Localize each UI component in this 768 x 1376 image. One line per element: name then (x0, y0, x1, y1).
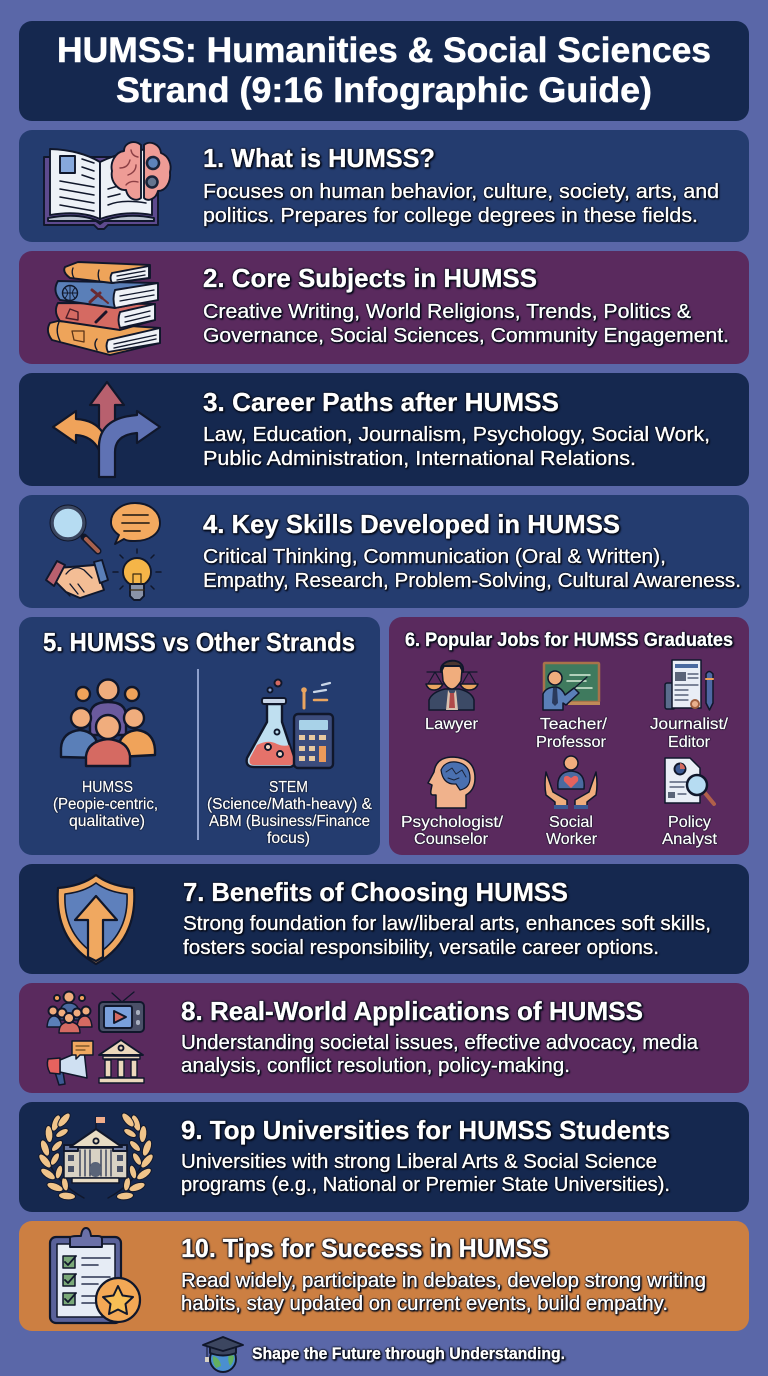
description (181, 1269, 706, 1315)
job: lawyer (426, 661, 478, 710)
heading: 7. Benefits of Choosing HUMSS (183, 877, 568, 907)
description (181, 1150, 670, 1196)
heading: 8. Real-World Applications of HUMSS (181, 996, 643, 1026)
label: HUMSS: HUMSS (82, 779, 133, 796)
description (183, 912, 711, 959)
panel: tips for success (19, 1221, 749, 1331)
title (57, 31, 711, 110)
job: journalist (665, 660, 713, 710)
label: HUMSS: qualitative) (69, 813, 145, 830)
panel: core subjects (19, 251, 749, 364)
label: psychologist: Counselor (414, 831, 489, 848)
description (203, 300, 729, 347)
heading: 6. Popular Jobs for HUMSS Graduates (405, 630, 733, 651)
description (203, 545, 741, 592)
label: journalist (650, 716, 729, 751)
label: lawyer: Lawyer (425, 716, 479, 733)
icon: clipboard with star badge (50, 1228, 140, 1323)
heading: 4. Key Skills Developed in HUMSS (203, 509, 620, 539)
icon: crowd, TV, megaphone, institution (47, 992, 144, 1085)
label: social worker: Social (549, 814, 593, 831)
label: HUMSS: (Peopie-centric, (53, 796, 158, 813)
heading: 1. What is HUMSS? (203, 143, 435, 173)
label: STEM and ABM: STEM (269, 779, 308, 796)
job: psychologist (428, 757, 475, 808)
panel: career paths (19, 373, 749, 486)
panel: popular jobs (389, 617, 749, 855)
label: journalist: Journalist/ (650, 716, 729, 733)
label: HUMSS (53, 779, 158, 830)
description: Governance, Social Sciences, Community Engagement. (203, 324, 729, 347)
icon: stack of books (48, 262, 160, 355)
icon: three-way arrows (53, 382, 160, 477)
description: fosters social responsibility, versatile career options. (183, 936, 659, 959)
footer (203, 1337, 565, 1372)
panel: key skills (19, 495, 749, 608)
description: Empathy, Research, Problem-Solving, Cultural Awareness. (203, 569, 741, 592)
label: policy analyst: Analyst (662, 831, 718, 848)
label: psychologist (401, 814, 504, 848)
panel: HUMSS vs other strands (19, 617, 380, 855)
description: Universities with strong Liberal Arts & Social Science (181, 1150, 657, 1173)
description (203, 423, 710, 470)
heading: 2. Core Subjects in HUMSS (203, 263, 537, 293)
label: policy analyst: Policy (668, 814, 711, 831)
description: habits, stay updated on current events, build empathy. (181, 1292, 668, 1315)
icon: group of people (61, 680, 155, 766)
heading: 3. Career Paths after HUMSS (203, 387, 559, 417)
description: Law, Education, Journalism, Psychology, Social Work, (203, 423, 710, 446)
description (203, 180, 719, 227)
title: Strand (9:16 Infographic Guide) (116, 71, 652, 110)
label: STEM and ABM: (Science/Math-heavy) & (207, 796, 372, 813)
description: Public Administration, International Relations. (203, 447, 636, 470)
description (181, 1031, 699, 1077)
icon: shield with up arrow (58, 875, 134, 964)
icon: open book and brain (44, 142, 171, 229)
job: teacher (543, 663, 600, 710)
title panel (19, 21, 749, 121)
panel: benefits (19, 864, 749, 974)
job: social worker (545, 756, 597, 809)
label: journalist: Editor (668, 734, 711, 751)
label: teacher: Teacher/ (540, 716, 608, 733)
label: STEM and ABM: focus) (267, 830, 310, 847)
panel: top universities (19, 1102, 749, 1212)
heading: 5. HUMSS vs Other Strands (43, 627, 355, 657)
label: teacher: Professor (536, 734, 607, 751)
description: Focuses on human behavior, culture, society, arts, and (203, 180, 719, 203)
label: STEM and ABM: ABM (Business/Finance (209, 813, 370, 830)
icon: flask and calculator (247, 680, 333, 768)
job: policy analyst (665, 758, 714, 804)
description: programs (e.g., National or Premier State Universities). (181, 1173, 670, 1196)
description: politics. Prepares for college degrees in these fields. (203, 204, 698, 227)
label: social worker (546, 814, 598, 848)
heading: 9. Top Universities for HUMSS Students (181, 1115, 670, 1145)
tagline: Shape the Future through Understanding. (252, 1345, 565, 1363)
description: Strong foundation for law/liberal arts, enhances soft skills, (183, 912, 711, 935)
label: STEM and ABM (207, 779, 372, 847)
label: psychologist: Psychologist/ (401, 814, 504, 831)
description: Creative Writing, World Religions, Trends, Politics & (203, 300, 691, 323)
description: Critical Thinking, Communication (Oral & Written), (203, 545, 666, 568)
label: policy analyst (662, 814, 718, 848)
icon: graduation cap on globe (203, 1337, 243, 1372)
label: teacher (536, 716, 608, 751)
icon: university building with laurels (37, 1111, 155, 1201)
title: HUMSS: Humanities & Social Sciences (57, 31, 711, 70)
panel: real-world applications (19, 983, 749, 1093)
description: Understanding societal issues, effective advocacy, media (181, 1031, 699, 1054)
icon: magnifier, speech bubble, handshake, bulb (46, 503, 161, 600)
panel: what is HUMSS (19, 130, 749, 242)
label: social worker: Worker (546, 831, 598, 848)
heading: 10. Tips for Success in HUMSS (181, 1233, 549, 1263)
description: analysis, conflict resolution, policy-making. (181, 1054, 570, 1077)
description: Read widely, participate in debates, develop strong writing (181, 1269, 706, 1292)
